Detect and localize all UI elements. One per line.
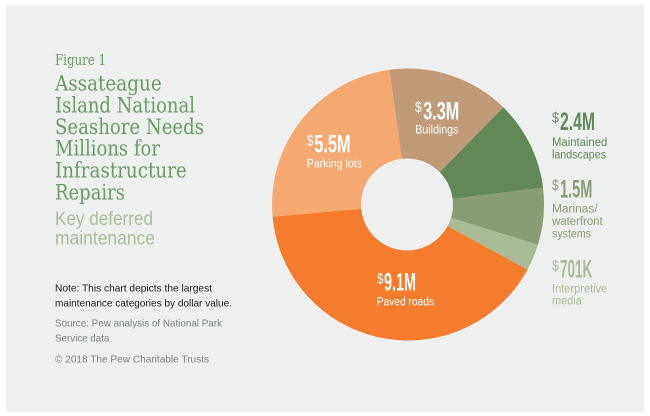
label: maintained landscapes: Maintained <box>552 137 607 149</box>
title: Island National <box>55 94 195 119</box>
source: Source: Pew analysis of National Park <box>55 318 223 330</box>
title <box>54 72 204 205</box>
label: paved roads: Paved roads <box>377 297 434 309</box>
label: interpretive media: Interpretive <box>552 284 607 296</box>
label: paved roads <box>377 270 434 309</box>
label: parking lots <box>307 132 362 171</box>
source <box>55 318 223 345</box>
label: parking lots: Parking lots <box>307 159 362 171</box>
label: marinas and waterfront systems <box>551 176 603 241</box>
slice: parking lots <box>272 70 408 217</box>
label: interpretive media: 701K <box>560 257 592 284</box>
note: Note: This chart depicts the largest <box>55 282 212 294</box>
note: maintenance categories by dollar value. <box>55 298 232 310</box>
label: marinas and waterfront systems: Marinas/ <box>552 204 599 216</box>
title: Millions for <box>55 137 161 162</box>
label: interpretive media <box>552 257 607 307</box>
slice: interpretive media <box>408 204 538 270</box>
title: Assateague <box>54 72 162 97</box>
label: buildings: 3.3M <box>423 98 459 125</box>
label: paved roads: 9.1M <box>384 270 416 297</box>
label: buildings <box>415 98 459 136</box>
subtitle: maintenance <box>55 227 155 249</box>
label: marinas and waterfront systems: 1.5M <box>560 176 592 203</box>
slice: maintained landscapes <box>408 107 543 204</box>
label: paved roads: $ <box>377 272 383 288</box>
label: maintained landscapes: $ <box>552 110 559 126</box>
title: Seashore Needs <box>55 115 204 140</box>
donut chart <box>272 68 544 340</box>
label: parking lots: $ <box>307 134 313 150</box>
donut hole <box>361 158 453 250</box>
label: buildings: Buildings <box>415 124 459 136</box>
label: parking lots: 5.5M <box>314 132 351 159</box>
title: Repairs <box>55 180 125 205</box>
slice: paved roads <box>273 204 527 340</box>
label: interpretive media: media <box>552 295 582 307</box>
label: interpretive media: $ <box>552 258 559 274</box>
slice: buildings <box>389 68 503 205</box>
label: marinas and waterfront systems: systems <box>552 229 591 241</box>
note <box>55 282 232 310</box>
figure label: Figure 1 <box>55 53 106 69</box>
subtitle: Key deferred <box>55 208 153 230</box>
source: Service data <box>55 333 109 345</box>
title: Infrastructure <box>55 159 187 184</box>
label: maintained landscapes <box>552 109 607 161</box>
slice: marinas and waterfront systems <box>408 188 544 245</box>
label: buildings: $ <box>415 100 422 116</box>
subtitle <box>55 208 155 249</box>
label: maintained landscapes: landscapes <box>552 149 606 161</box>
label: maintained landscapes: 2.4M <box>560 109 595 136</box>
label: marinas and waterfront systems: $ <box>552 178 559 194</box>
copyright: © 2018 The Pew Charitable Trusts <box>55 354 209 366</box>
label: marinas and waterfront systems: waterfront <box>551 216 603 228</box>
